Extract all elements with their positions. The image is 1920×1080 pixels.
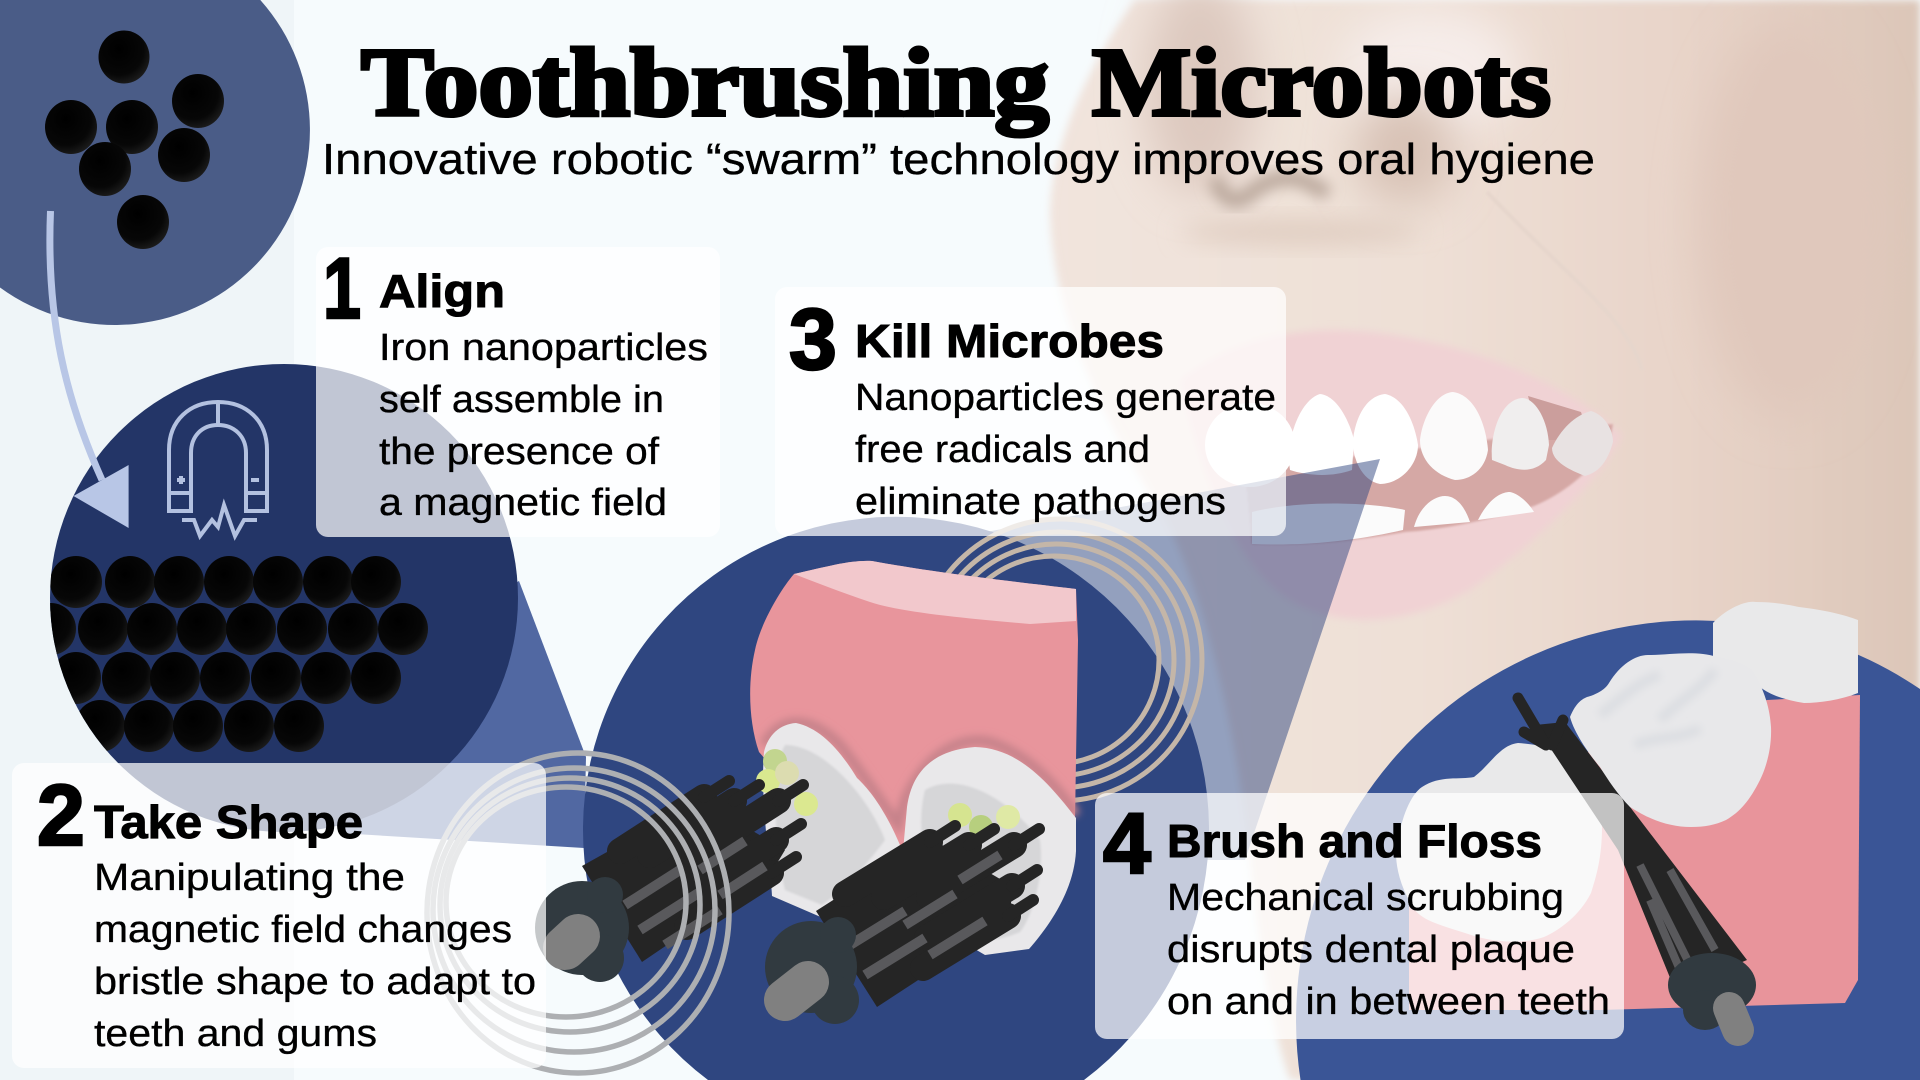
tooth: far molar [1713, 602, 1858, 703]
body text: free radicals and [855, 429, 1150, 471]
number 2: 2 [37, 768, 85, 864]
title [361, 29, 1551, 137]
body text: on and in between teeth [1167, 981, 1610, 1023]
body text [855, 377, 1276, 523]
gum [750, 561, 1078, 860]
microbot brush: left [535, 781, 803, 982]
panel: step 1 align [316, 241, 720, 537]
body text [1167, 877, 1610, 1023]
body text: disrupts dental plaque [1167, 929, 1575, 971]
body text: teeth and gums [94, 1013, 377, 1055]
body text: bristle shape to adapt to [94, 961, 536, 1003]
number 3: 3 [789, 292, 837, 388]
body text: a magnetic field [379, 482, 667, 524]
heading: Kill Microbes [855, 315, 1164, 367]
zoom wedge: mouth to teeth circle [900, 459, 1380, 860]
nanoparticle lattice [26, 556, 428, 752]
circle: toothbrushing close-up [427, 517, 1209, 1080]
plaque dots [756, 749, 1020, 839]
tooth: lower left [1396, 743, 1602, 942]
panel: step 3 kill microbes [775, 287, 1286, 536]
circle: brush and floss scene [1296, 602, 1920, 1080]
circle: free nanoparticles [0, 0, 310, 325]
body text: the presence of [379, 431, 659, 473]
icon: magnet [169, 402, 267, 536]
microbot brush: right [765, 826, 1039, 1024]
zoom wedge: aligned particles to bristle [300, 581, 586, 848]
magnetic field rings: left [427, 753, 729, 1073]
body text: self assemble in [379, 379, 664, 421]
panel: step 2 take shape [12, 763, 546, 1068]
body text: Iron nanoparticles [379, 327, 708, 369]
title: Microbots [1092, 29, 1551, 137]
subtitle: Innovative robotic “swarm” technology improves oral hygiene [322, 135, 1595, 184]
nanoparticles loose [45, 30, 224, 249]
microbot brush: flossing [1518, 698, 1756, 1030]
body text [94, 857, 536, 1055]
title: Toothbrushing [361, 29, 1049, 137]
heading: Take Shape [94, 796, 363, 848]
number 1: 1 [323, 241, 361, 337]
heading: Brush and Floss [1167, 815, 1542, 867]
tooth: right [900, 747, 1076, 955]
panel: step 4 brush and floss [1095, 793, 1624, 1039]
tooth: middle molar [1570, 653, 1771, 827]
heading: Align [379, 265, 505, 317]
gum [1409, 695, 1860, 1010]
circle: aligned nanoparticles [26, 364, 518, 832]
photo: mouth with teeth [1180, 330, 1622, 620]
body text: magnetic field changes [94, 909, 512, 951]
number 4: 4 [1103, 796, 1151, 892]
magnetic field rings: right [918, 519, 1202, 801]
body text: Mechanical scrubbing [1167, 877, 1564, 919]
photo: smiling face background [1050, 0, 1920, 1080]
body text [379, 327, 708, 524]
arrow: particles to alignment [50, 211, 129, 528]
tooth: left [763, 723, 900, 918]
body text: Nanoparticles generate [855, 377, 1276, 419]
body text: Manipulating the [94, 857, 405, 899]
body text: eliminate pathogens [855, 481, 1226, 523]
